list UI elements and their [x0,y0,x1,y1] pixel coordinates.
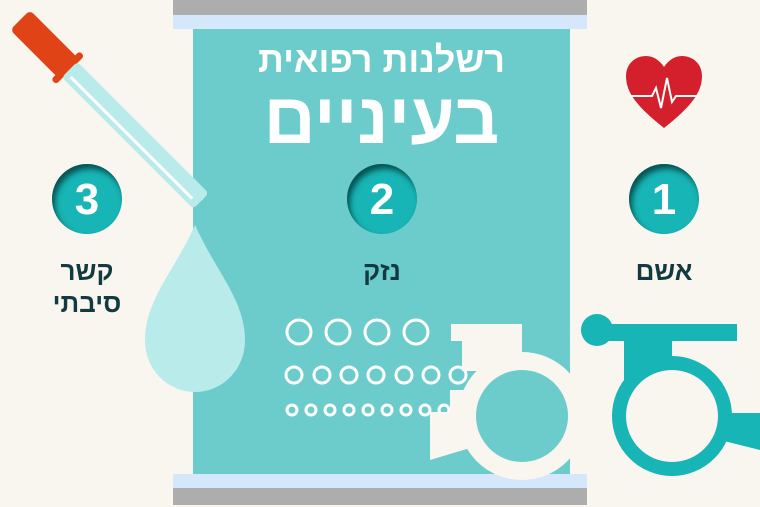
number 2 [347,164,417,234]
icon: dropper [12,12,245,392]
label 3 [53,256,121,318]
drop [145,225,245,392]
title: רשלנות רפואית [258,39,505,80]
teal panel [193,29,570,474]
number 3: 3 [75,175,99,224]
top bars [173,0,587,29]
label 3: קשר [61,256,113,286]
icon: trial frame glasses [430,314,760,480]
number 3 [52,164,122,234]
number 1 [629,164,699,234]
number 1: 1 [652,175,676,224]
icon: heart [626,56,702,128]
eye chart dots [284,318,468,416]
label 2: נזק [363,256,401,286]
label 1: אשם [636,256,692,286]
label 3: סיבתי [53,288,121,318]
title: בעיניים [264,79,499,159]
number 2: 2 [370,175,394,224]
bottom bars [173,474,587,505]
title [258,39,505,159]
